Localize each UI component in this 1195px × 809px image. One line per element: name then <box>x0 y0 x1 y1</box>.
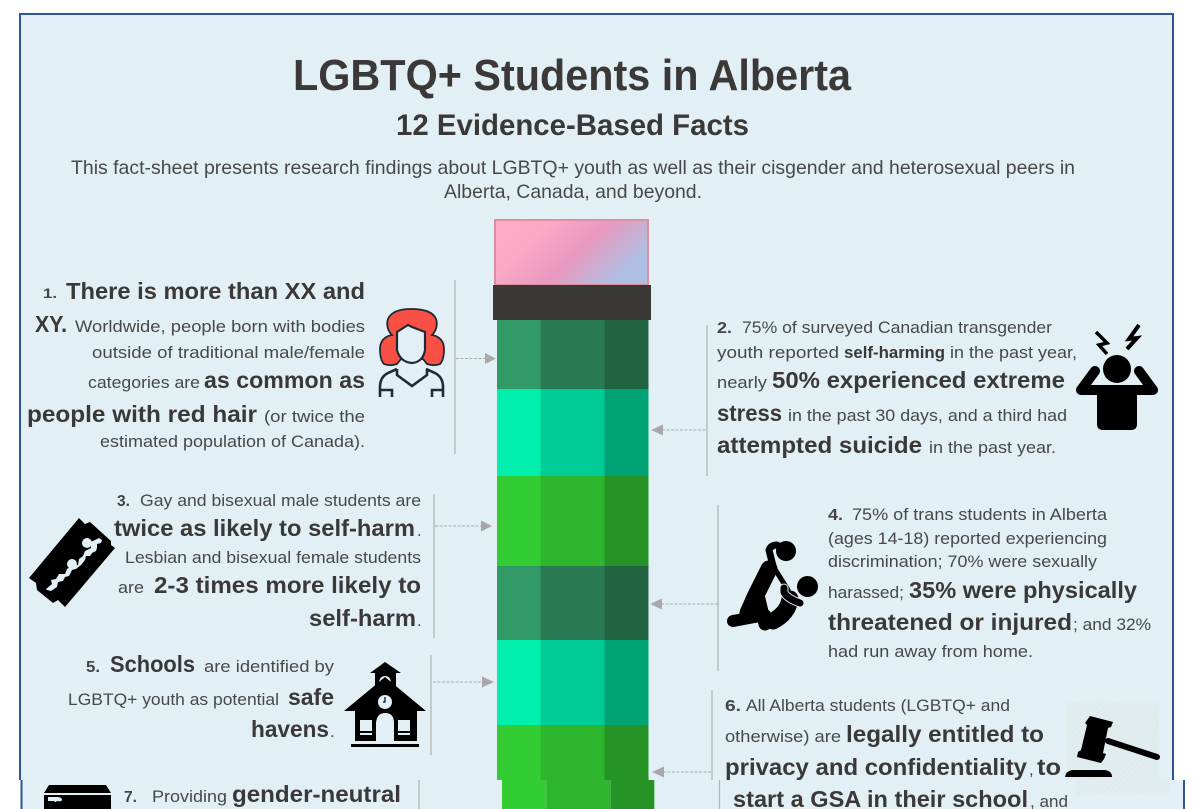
fact 6 text (upper lines): , <box>1029 761 1034 779</box>
fact 3 text <box>114 492 422 631</box>
segment teal 1 <box>497 389 648 476</box>
fact 2 text: youth reported <box>717 344 839 362</box>
fact 1 text: people with red hair <box>27 401 257 427</box>
fact 3 text: . <box>417 522 422 540</box>
fact 2 text: in the past year, <box>950 344 1077 362</box>
arrow: fact 1 <box>455 280 496 454</box>
icon: washroom sign <box>44 785 111 809</box>
icon: physical assault figures <box>733 541 818 624</box>
fact 5 text: LGBTQ+ youth as potential <box>68 691 279 709</box>
fact 5 text: . <box>330 723 335 741</box>
fact 2 text: in the past 30 days, and a third had <box>788 407 1067 425</box>
intro text: This fact-sheet presents research findings about LGBTQ+ youth as well as their cisgender and heterosexual peers in <box>71 157 1075 179</box>
icon: school house <box>344 662 426 747</box>
fact 4 text: discrimination; 70% were sexually <box>828 553 1098 571</box>
fact 1 text: 1. <box>43 285 57 301</box>
fact 4 text: had run away from home. <box>828 643 1033 661</box>
fact 5 text: 5. <box>86 659 100 676</box>
fact 1 text: categories are <box>88 374 200 392</box>
fact 2 text: 50% experienced extreme <box>772 367 1065 393</box>
segment dark green 1 <box>497 320 648 389</box>
fact 1 text: There is more than XX and <box>66 278 365 304</box>
fact 4 text: 75% of trans students in Alberta <box>852 506 1108 524</box>
fact 6 text (upper lines): All Alberta students (LGBTQ+ and <box>746 697 1010 715</box>
fact 4 text: ; and 32% <box>1073 616 1151 634</box>
fact 2 text: self-harming <box>844 344 945 362</box>
fact 4 text: 35% were physically <box>909 577 1137 603</box>
icon: gavel <box>1065 701 1159 780</box>
fact 7 text: Providing <box>152 788 227 806</box>
fact 3 text: . <box>417 612 422 630</box>
subtitle: 12 Evidence-Based Facts <box>396 109 749 142</box>
segment dark green 2 <box>497 566 648 640</box>
icon: stressed person <box>1081 325 1153 430</box>
fact 3 text: 3. <box>117 493 130 510</box>
fact 3 text: 2-3 times more likely to <box>154 572 421 598</box>
fact 5 text: are identified by <box>204 658 335 676</box>
fact 2 text: 2. <box>717 320 732 337</box>
title: LGBTQ+ Students in Alberta <box>293 51 851 100</box>
fact 4 text: harassed; <box>828 584 904 602</box>
fact 2 text: 75% of surveyed Canadian transgender <box>742 319 1053 337</box>
intro text <box>71 157 1075 203</box>
pencil column (upper part) <box>493 220 651 780</box>
fact 2 text: nearly <box>717 374 768 392</box>
intro text: Alberta, Canada, and beyond. <box>444 181 702 203</box>
eraser <box>495 220 648 285</box>
fact 3 text: twice as likely to self-harm <box>114 515 415 541</box>
fact 4 text: 4. <box>828 507 843 524</box>
fact 6 text (upper lines) <box>725 697 1061 780</box>
pencil column (lower part) <box>502 780 654 809</box>
segment green 1 <box>497 476 648 566</box>
gavel backing in lower panel <box>1076 780 1170 795</box>
fact 2 text <box>717 319 1077 458</box>
fact 2 text: attempted suicide <box>717 432 922 458</box>
arrow: fact 4 <box>650 505 718 671</box>
arrow: fact 2 <box>651 325 707 476</box>
fact 7 text: 7. <box>124 789 137 806</box>
divider: fact 7 <box>418 780 420 809</box>
fact 4 text: threatened or injured <box>828 609 1072 635</box>
fact 3 text: self-harm <box>309 605 416 631</box>
ferrule <box>493 285 651 320</box>
fact 6 text (upper lines): privacy and confidentiality <box>725 754 1027 780</box>
fact 1 text: XY. <box>35 311 67 337</box>
fact 2 text: in the past year. <box>929 439 1056 457</box>
fact 5 text: Schools <box>110 651 195 677</box>
fact 2 text: stress <box>717 400 782 426</box>
fact 3 text: are <box>118 579 144 597</box>
segment green 2 <box>497 725 648 780</box>
fact 7 text <box>124 781 401 807</box>
arrow: fact 3 <box>434 494 492 638</box>
fact 1 text: outside of traditional male/female <box>92 344 365 362</box>
segment teal 2 <box>497 640 648 725</box>
fact 3 text: Lesbian and bisexual female students <box>125 549 421 567</box>
fact 1 text: estimated population of Canada). <box>100 433 365 451</box>
fact 6 text (upper lines): legally entitled to <box>846 721 1044 747</box>
fact 3 text: Gay and bisexual male students are <box>140 492 421 510</box>
fact 1 text: as common as <box>204 367 365 393</box>
fact 5 text <box>68 651 335 742</box>
fact 4 text: (ages 14-18) reported experiencing <box>828 530 1107 548</box>
icon: person with red hair <box>380 309 444 397</box>
fact 6 text (upper lines): to <box>1037 754 1061 780</box>
fact 4 text <box>828 506 1151 661</box>
fact 6 text (upper lines): otherwise) are <box>725 728 841 746</box>
divider: fact 8 <box>718 780 720 809</box>
arrow: fact 5 <box>431 655 494 755</box>
fact 5 text: safe <box>288 684 334 710</box>
fact 6 text (upper lines): 6. <box>725 698 741 715</box>
fact 1 text: (or twice the <box>264 408 365 426</box>
fact 7 text: gender-neutral <box>232 781 401 807</box>
fact 1 text: Worldwide, people born with bodies <box>75 318 365 336</box>
arrow: fact 6 <box>652 690 712 780</box>
panel: lower shifted background <box>22 780 1184 809</box>
fact 5 text: havens <box>251 716 329 742</box>
fact 1 text <box>27 278 365 451</box>
icon: razor blade <box>29 518 115 607</box>
